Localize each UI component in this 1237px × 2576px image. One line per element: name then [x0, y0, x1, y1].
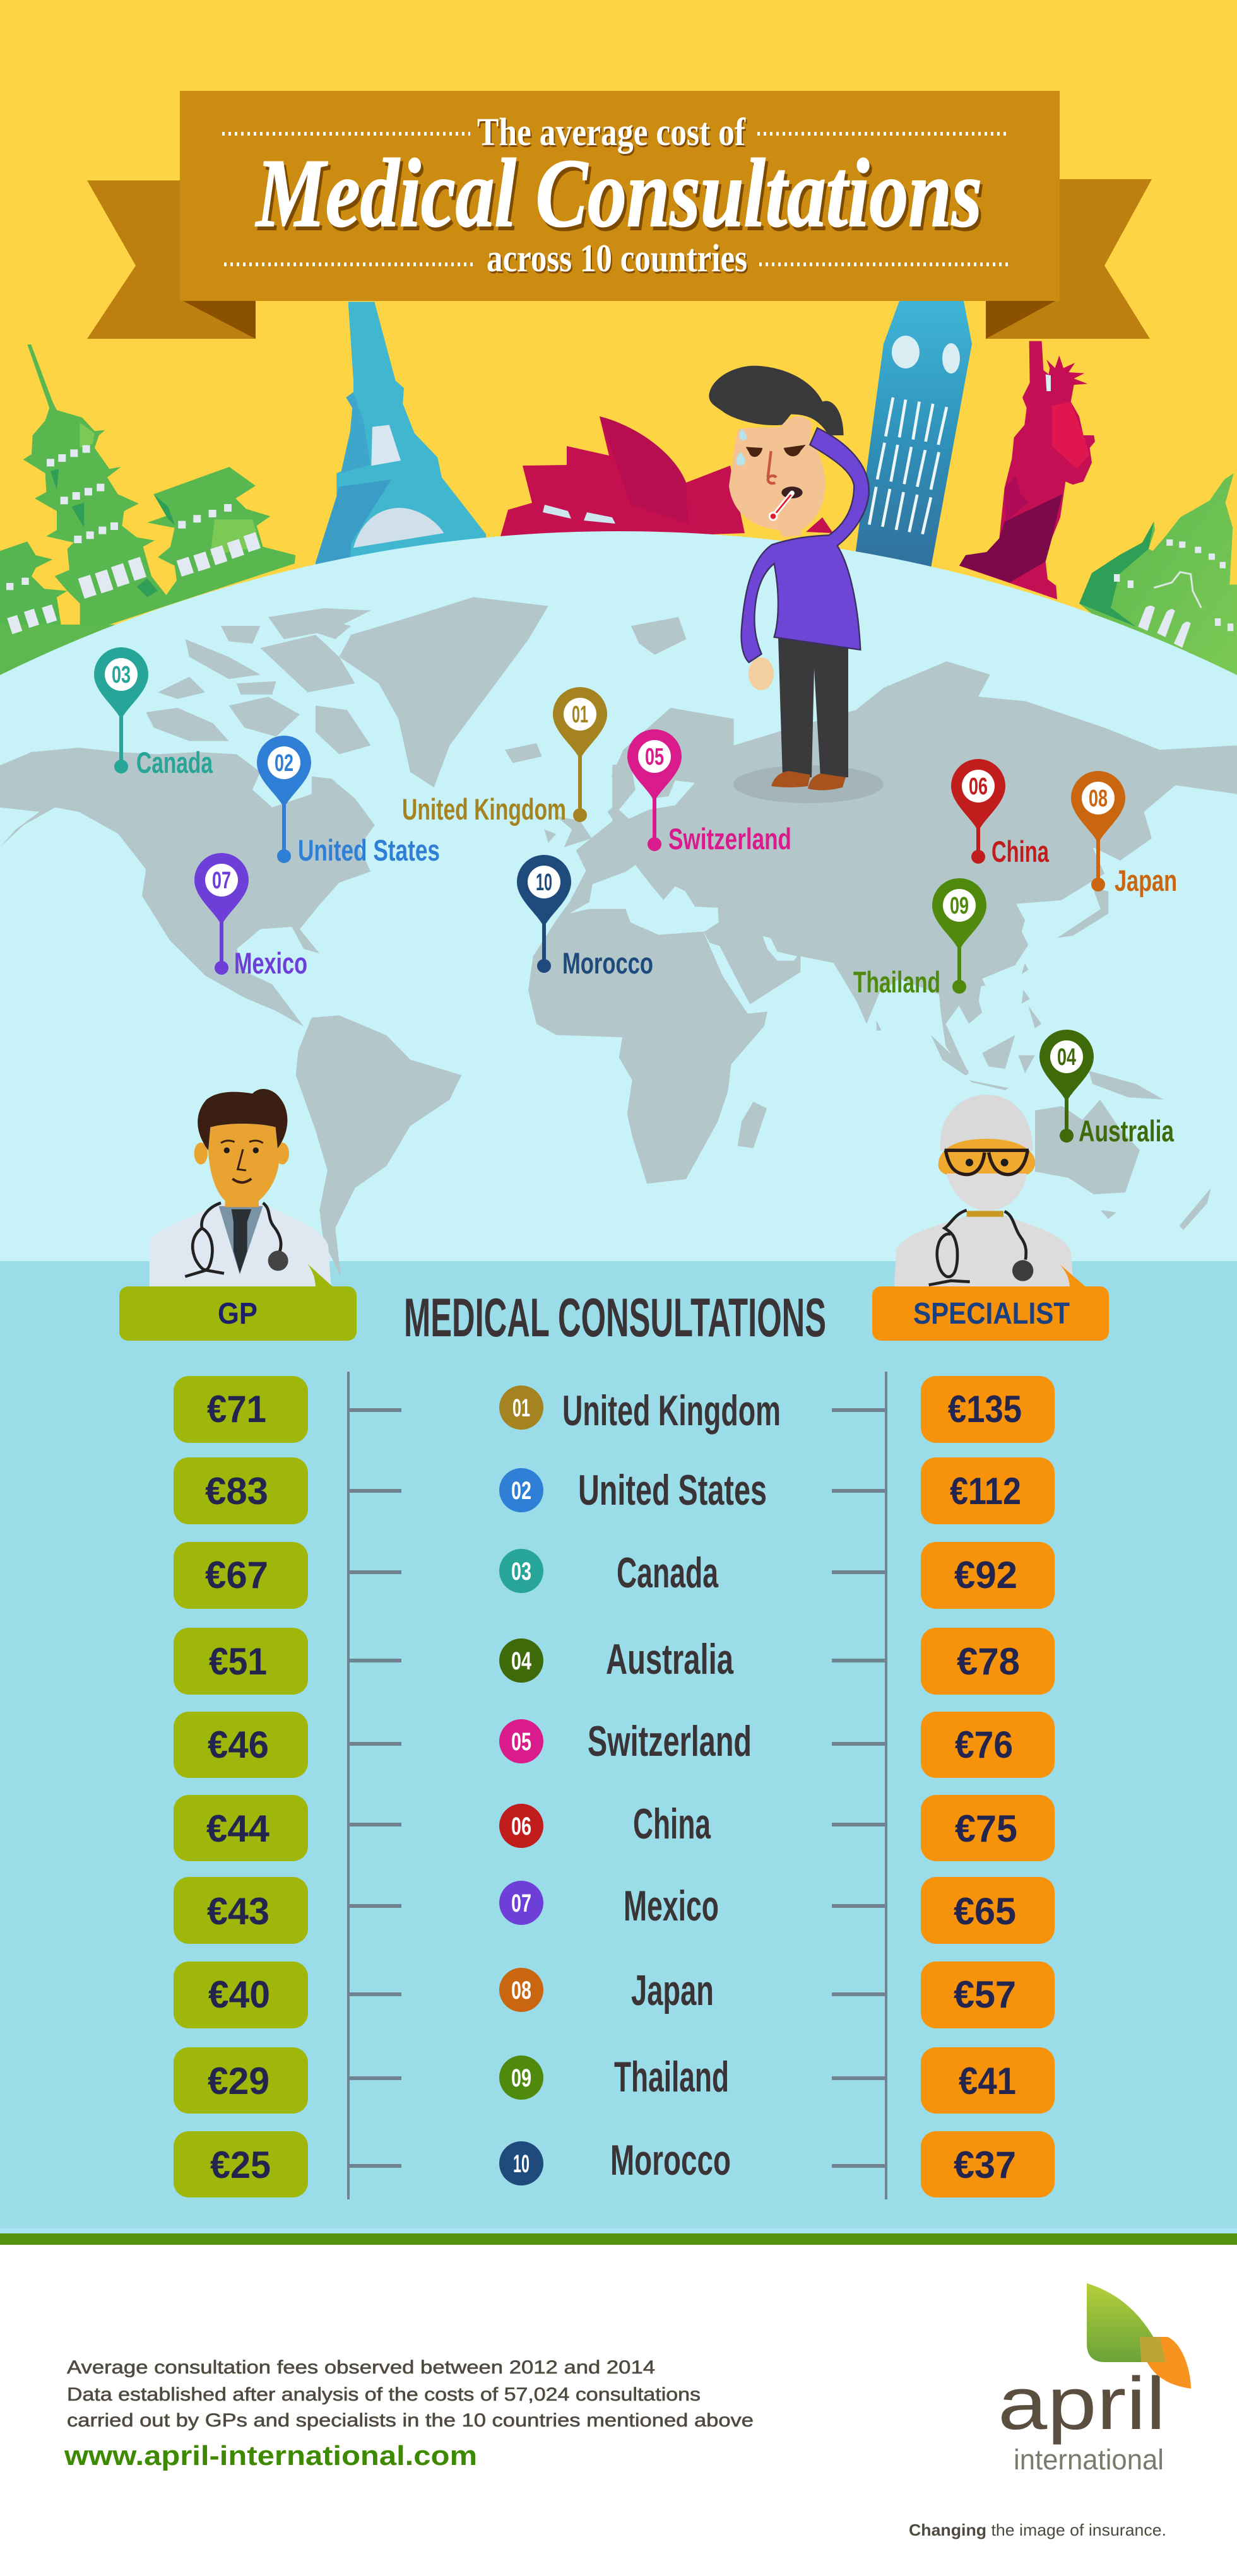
dotted rules — [222, 134, 1010, 264]
row 04 Australia: €78 — [957, 1640, 1020, 1683]
green divider — [0, 2233, 1237, 2245]
GP hair — [198, 1089, 287, 1150]
map pin 02 United States: United States — [298, 833, 440, 867]
New Guinea — [1089, 1071, 1164, 1100]
map pin 09 Thailand — [853, 878, 986, 999]
row 04 Australia: 04 — [511, 1647, 532, 1675]
row 01 United Kingdom — [174, 1376, 1055, 1443]
row 03 Canada: 03 — [511, 1558, 531, 1585]
nose — [768, 451, 776, 483]
row 07 Mexico: Mexico — [624, 1882, 719, 1930]
map pin 07 Mexico: Mexico — [234, 946, 307, 980]
Philippines — [1022, 990, 1041, 1028]
map pin 07 Mexico — [194, 853, 307, 980]
row 04 Australia — [174, 1628, 1055, 1695]
row 04 Australia: €51 — [209, 1640, 267, 1683]
Madagascar — [738, 1102, 767, 1148]
Greenland — [340, 597, 548, 787]
landmark: domed cathedral — [1079, 473, 1237, 686]
logo: international: international — [1014, 2444, 1164, 2476]
GP stethoscope — [185, 1203, 281, 1276]
map pin 01 United Kingdom: 01 — [572, 702, 588, 728]
Iceland — [505, 743, 542, 763]
footer — [0, 2245, 1237, 2576]
title banner — [87, 91, 1152, 339]
map pin 05 Switzerland: Switzerland — [668, 822, 791, 856]
footnote text: Data established after analysis of the costs of 57,024 consultations — [67, 2384, 701, 2405]
landmark: Japanese pagodas — [0, 344, 295, 694]
row 06 China: China — [633, 1800, 711, 1848]
Taiwan and Hainan — [980, 963, 1028, 987]
patient hand — [749, 657, 774, 690]
row 05 Switzerland: 05 — [511, 1728, 531, 1756]
footnote text: carried out by GPs and specialists in the 10 countries mentioned above — [67, 2410, 754, 2431]
row 02 United States: United States — [578, 1466, 767, 1514]
tagline: Changing the image of insurance. — [909, 2520, 1166, 2539]
row 09 Thailand: €29 — [208, 2060, 269, 2102]
row 01 United Kingdom: United Kingdom — [562, 1387, 781, 1435]
table heading: MEDICAL CONSULTATIONS — [404, 1288, 826, 1348]
Persian Gulf — [762, 936, 797, 961]
yellow background — [0, 0, 1237, 1325]
row 03 Canada: Canada — [617, 1549, 719, 1597]
surgeon glasses — [945, 1150, 1029, 1175]
row 10 Morocco — [174, 2131, 1055, 2197]
row 10 Morocco: €25 — [210, 2144, 271, 2186]
row 01 United Kingdom: 01 — [512, 1394, 530, 1422]
logo: April leaf mark — [1087, 2283, 1191, 2389]
row 07 Mexico: €43 — [207, 1890, 269, 1932]
landmark: Big Ben — [855, 301, 972, 568]
row 01 United Kingdom: €71 — [207, 1388, 266, 1430]
face — [729, 416, 825, 538]
specialist tag: SPECIALIST — [913, 1297, 1070, 1331]
row 06 China: €75 — [955, 1808, 1017, 1850]
surgeon gown — [894, 1216, 1074, 1289]
hair — [709, 366, 844, 435]
row 02 United States: €112 — [950, 1470, 1021, 1512]
row 08 Japan: €40 — [208, 1973, 270, 2016]
patient legs — [778, 637, 848, 777]
New Zealand — [1180, 1188, 1211, 1230]
row 02 United States: 02 — [511, 1477, 531, 1505]
right ribbon tail — [986, 179, 1152, 339]
eyes and brows — [746, 445, 806, 457]
Sumatra — [931, 1035, 969, 1076]
surgeon stethoscope — [929, 1210, 1026, 1285]
row 09 Thailand — [174, 2047, 1055, 2114]
map pin 06 China: 06 — [969, 773, 988, 800]
Arctic islands — [146, 608, 371, 755]
row 07 Mexico: €65 — [954, 1890, 1016, 1932]
northern Eurasia — [588, 661, 1237, 909]
GP tag — [119, 1264, 357, 1341]
row 09 Thailand: 09 — [511, 2064, 531, 2092]
row 04 Australia: Australia — [606, 1635, 734, 1683]
specialist surgeon illustration — [894, 1095, 1074, 1289]
map pin 02 United States — [257, 736, 440, 867]
ribbon folds — [183, 301, 1055, 339]
Svalbard islands — [631, 617, 687, 655]
surgeon mask — [947, 1173, 1027, 1211]
map pin 01 United Kingdom — [402, 687, 607, 826]
mouth — [781, 486, 803, 498]
website URL: www.april-international.com — [64, 2440, 477, 2471]
surgeon cap — [940, 1095, 1033, 1150]
map pin 03 Canada: Canada — [136, 746, 213, 779]
map pin 09 Thailand: 09 — [950, 893, 969, 919]
GP tag: GP — [218, 1297, 257, 1331]
globe — [0, 531, 1237, 1262]
map pin 10 Morocco: Morocco — [562, 946, 653, 980]
row 03 Canada: €67 — [205, 1554, 268, 1596]
map pin 10 Morocco — [517, 855, 653, 980]
map pin 01 United Kingdom: United Kingdom — [402, 792, 566, 826]
row 09 Thailand: Thailand — [614, 2053, 729, 2101]
row 03 Canada: €92 — [954, 1554, 1017, 1596]
surgeon collar — [967, 1211, 1003, 1217]
map pin 03 Canada: 03 — [112, 662, 131, 688]
subtitle top: The average cost of — [477, 111, 746, 154]
North America — [0, 748, 375, 1026]
footer background — [0, 2245, 1237, 2576]
Japan — [1057, 887, 1108, 938]
GP coat — [150, 1203, 331, 1289]
GP facial features — [221, 1141, 263, 1182]
map pin 08 Japan: Japan — [1115, 864, 1177, 897]
footnote text: Average consultation fees observed between 2012 and 2014 — [67, 2357, 655, 2378]
landmark: Sydney Opera House — [500, 416, 833, 543]
map pin 04 Australia: 04 — [1057, 1044, 1076, 1071]
main title: Medical Consultations — [255, 139, 982, 247]
row 03 Canada — [174, 1542, 1055, 1609]
row 06 China: 06 — [511, 1813, 531, 1840]
row 09 Thailand: €41 — [959, 2060, 1016, 2102]
Java — [969, 1080, 1009, 1090]
map pin 10 Morocco: 10 — [536, 869, 552, 896]
landmark: Eiffel Tower — [316, 302, 488, 591]
banner panel — [180, 91, 1060, 301]
map pin 08 Japan — [1071, 771, 1177, 897]
row 05 Switzerland: €46 — [208, 1724, 269, 1766]
row 08 Japan: Japan — [631, 1967, 714, 2014]
row 05 Switzerland — [174, 1712, 1055, 1778]
Mediterranean Sea — [569, 865, 719, 935]
map pin 05 Switzerland: 05 — [645, 744, 664, 770]
patient shoes — [771, 771, 846, 791]
row 07 Mexico — [174, 1877, 1055, 1944]
Tasmania — [1101, 1210, 1116, 1219]
light stripe above footer — [0, 2228, 1237, 2233]
Sulawesi — [1019, 1056, 1035, 1073]
Red Sea — [703, 931, 769, 1014]
GP ears — [194, 1143, 208, 1165]
patient shadow — [733, 765, 884, 803]
footnote text — [67, 2357, 754, 2431]
map pin 04 Australia: Australia — [1079, 1114, 1175, 1148]
row 06 China: €44 — [206, 1808, 270, 1850]
map pin 05 Switzerland — [627, 729, 791, 856]
map pin 08 Japan: 08 — [1089, 785, 1108, 812]
row 08 Japan: €57 — [954, 1973, 1016, 2016]
row 08 Japan — [174, 1961, 1055, 2028]
left ribbon tail — [87, 180, 256, 339]
Sri Lanka — [877, 1020, 882, 1030]
specialist tag — [872, 1264, 1109, 1341]
thermometer — [774, 493, 792, 515]
Baltic Sea — [619, 772, 695, 819]
landmark: Statue of Liberty — [959, 341, 1095, 599]
row 02 United States — [174, 1457, 1055, 1524]
Africa, Middle East, southern Europe and South Asia — [528, 765, 1054, 1184]
row 05 Switzerland: €76 — [955, 1724, 1013, 1766]
map pin 04 Australia — [1039, 1030, 1175, 1148]
table section background — [0, 1261, 1237, 2228]
row 10 Morocco: €37 — [954, 2144, 1016, 2186]
row 02 United States: €83 — [205, 1470, 268, 1512]
table vertical rules — [348, 1372, 886, 2199]
row 05 Switzerland: Switzerland — [588, 1717, 752, 1765]
jumper — [742, 428, 869, 662]
sweat drops — [736, 429, 747, 466]
row 10 Morocco: Morocco — [610, 2136, 731, 2184]
Borneo — [982, 1035, 1015, 1069]
map pin 09 Thailand: Thailand — [853, 965, 940, 999]
map pin 02 United States: 02 — [275, 750, 293, 777]
map pin 06 China: China — [991, 835, 1050, 868]
patient — [709, 366, 884, 803]
logo: april wordmark: april — [998, 2362, 1166, 2445]
row 01 United Kingdom: €135 — [948, 1388, 1022, 1430]
GP face — [208, 1124, 280, 1207]
row 08 Japan: 08 — [511, 1977, 531, 2004]
world map — [0, 597, 1237, 1276]
South America — [296, 1015, 461, 1276]
British Isles — [544, 816, 592, 847]
GP shirt and tie — [219, 1206, 263, 1274]
map pin 03 Canada — [94, 647, 213, 779]
row 10 Morocco: 10 — [513, 2150, 530, 2178]
doctor GP illustration — [150, 1089, 331, 1289]
surgeon skin band — [938, 1139, 1035, 1175]
row 06 China — [174, 1795, 1055, 1861]
row 07 Mexico: 07 — [511, 1890, 531, 1917]
map pin 07 Mexico: 07 — [212, 867, 231, 894]
map pin 06 China — [951, 759, 1050, 868]
Australia — [1035, 1100, 1140, 1194]
subtitle bottom: across 10 countries — [487, 237, 747, 280]
